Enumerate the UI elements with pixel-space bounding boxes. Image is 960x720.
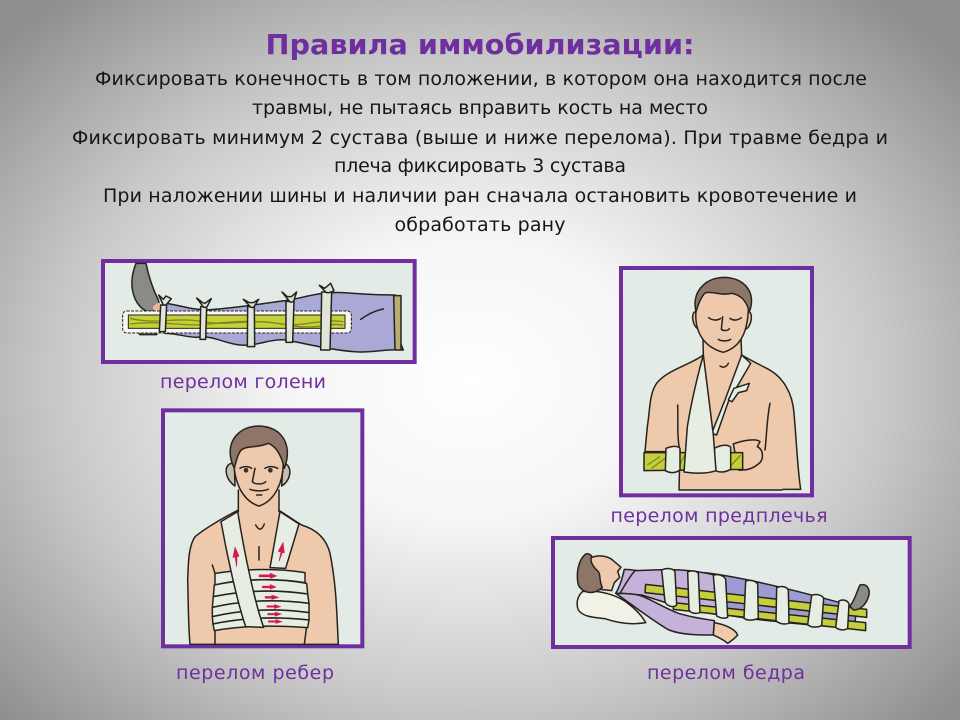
pillow <box>577 591 646 624</box>
chest bandage <box>212 569 309 631</box>
text block: rules: обработать рану <box>394 214 566 236</box>
wood grain <box>130 318 343 327</box>
neck <box>239 490 278 527</box>
legs <box>705 573 857 628</box>
eyes nose mouth <box>709 317 741 341</box>
shoulder strap right <box>270 512 299 568</box>
forearm splint <box>644 453 743 471</box>
padded splint <box>123 311 351 333</box>
wooden splint <box>128 315 345 328</box>
text block: rules: Фиксировать минимум 2 сустава (выше и ниже перелома). При травме бедра и <box>72 127 888 149</box>
red arrows <box>233 543 284 624</box>
head <box>588 556 621 591</box>
face <box>234 434 283 506</box>
shoe <box>132 263 159 312</box>
shoulder strap left <box>221 512 264 627</box>
panel: femur fracture <box>553 538 910 647</box>
wood grain <box>647 455 741 468</box>
torso and arms <box>645 355 801 490</box>
ears <box>693 312 751 329</box>
neck <box>704 340 741 371</box>
text block: rules: плеча фиксировать 3 сустава <box>334 155 626 177</box>
forearm hand <box>733 440 762 470</box>
face <box>696 287 748 352</box>
panel: rib fracture <box>163 410 362 646</box>
arm <box>617 593 714 635</box>
torso in lilac sweater <box>620 570 720 615</box>
lower splint <box>673 603 866 631</box>
panel: forearm fracture <box>621 268 812 495</box>
sling tie strap <box>712 355 751 435</box>
bandage wraps <box>665 445 731 473</box>
panel: lower leg fracture <box>103 261 415 362</box>
eyes nose mouth <box>240 467 278 495</box>
text block: rules <box>72 68 888 236</box>
sling <box>684 355 716 473</box>
bandages <box>159 292 332 350</box>
hair <box>230 426 287 468</box>
text block: rules: При наложении шины и наличии ран сначала остановить кровотечение и <box>103 185 857 207</box>
heel of shoe <box>137 330 157 335</box>
hair <box>577 554 602 592</box>
text block: rules: травмы, не пытаясь вправить кость на место <box>252 97 708 119</box>
caption: lower leg: перелом голени <box>160 371 326 393</box>
trouser leg <box>165 293 403 352</box>
ears <box>226 463 290 486</box>
trouser crease <box>361 309 383 319</box>
neck and collar <box>616 569 645 593</box>
caption: femur: перелом бедра <box>647 662 805 684</box>
ankle <box>153 303 164 312</box>
upper splint <box>645 584 867 617</box>
knot <box>728 383 749 402</box>
waistband <box>394 296 401 350</box>
bandages <box>662 568 849 630</box>
caption: forearm: перелом предплечья <box>610 505 828 527</box>
knots <box>159 283 334 307</box>
title: Правила иммобилизации: <box>266 28 694 61</box>
torso and arms <box>188 510 338 644</box>
shoe <box>850 585 869 610</box>
hair <box>695 277 752 312</box>
hand <box>713 623 738 643</box>
text block: rules: Фиксировать конечность в том положении, в котором она находится после <box>95 68 867 90</box>
caption: ribs: перелом ребер <box>176 662 334 684</box>
